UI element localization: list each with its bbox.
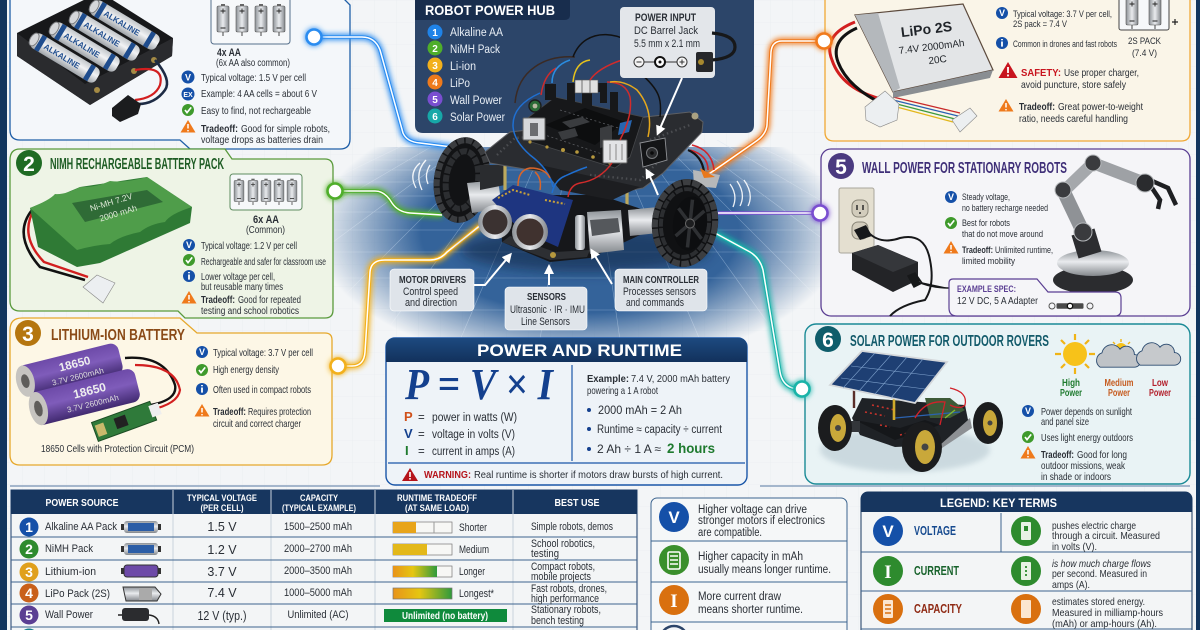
worked example: 2000 mAh = 2 Ah xyxy=(598,403,682,417)
runtime header xyxy=(386,338,747,362)
illustration: AA battery holder: ALKALINE xyxy=(42,42,82,71)
panel 5: wall power xyxy=(821,149,1190,316)
formula key xyxy=(404,409,517,458)
legend row: voltage: V xyxy=(882,522,894,541)
hub key list: 6 xyxy=(432,112,438,123)
callout: main controller xyxy=(615,269,707,311)
arrow: NiMH connector xyxy=(326,182,442,215)
callout: power input: 5.5 mm x 2.1 mm xyxy=(634,38,700,50)
row: wall power xyxy=(20,604,601,627)
formula key: current in amps (A) xyxy=(432,446,515,458)
legend row: voltage: VOLTAGE xyxy=(914,524,956,538)
table header: CAPACITY xyxy=(300,493,339,504)
bullet list: LiPo specs: Typical voltage: 3.7 V per cell, xyxy=(1013,9,1112,20)
hub key list: 1 xyxy=(432,28,438,39)
formula key: = xyxy=(418,446,425,458)
row: lithium-ion: 3 xyxy=(25,564,33,580)
takeaway: current: means shorter runtime. xyxy=(698,604,803,616)
bullet list: alkaline facts: Typical voltage: 1.5 V per cell xyxy=(201,72,306,84)
callout: sensors: Ultrasonic · IR · IMU xyxy=(510,304,585,316)
text: cell configuration: (Common) xyxy=(246,225,285,236)
text: cell configuration xyxy=(216,47,290,69)
row: NiMH: NiMH Pack xyxy=(45,543,93,555)
row: NiMH: 2000–2700 mAh xyxy=(284,543,352,555)
heading: NIMH RECHARGEABLE BATTERY PACK xyxy=(50,156,224,173)
bullet list: li-ion facts: Requires protection xyxy=(248,406,311,418)
table header: TYPICAL VOLTAGE xyxy=(187,493,257,504)
bullet list: wall power facts: V xyxy=(948,192,954,202)
badge 5: 5 xyxy=(835,156,847,179)
icon: 2S pack diagram: 2S PACK xyxy=(1128,36,1162,47)
table header: RUNTIME TRADEOFF xyxy=(397,493,477,504)
row: LiPo: 4 xyxy=(25,585,33,601)
illustration: 18650 cells with PCM: 18650 xyxy=(72,380,108,402)
hub key list xyxy=(428,24,505,124)
takeaway: voltage: are compatible. xyxy=(698,527,762,539)
callout: motor drivers: Control speed xyxy=(403,286,458,298)
table header: (TYPICAL EXAMPLE) xyxy=(282,503,356,514)
bullet list: NiMH facts: Lower voltage per cell, xyxy=(201,272,275,283)
bullet list: li-ion facts: Tradeoff: xyxy=(213,406,246,418)
bullet list: solar facts: Good for long xyxy=(1077,449,1127,461)
panel 1: alkaline AA xyxy=(10,0,350,149)
heading: WALL POWER FOR STATIONARY ROBOTS xyxy=(862,160,1067,177)
arrow: controller to jack xyxy=(647,171,658,195)
row: wall power: Wall Power xyxy=(45,609,93,621)
takeaway: capacity: usually means longer runtime. xyxy=(698,564,831,576)
bullet list: NiMH facts: Tradeoff: xyxy=(201,295,235,306)
panel 2: NiMH pack xyxy=(10,149,333,318)
illustration: AA battery holder: ALKALINE xyxy=(62,31,102,60)
legend header: LEGEND: KEY TERMS xyxy=(940,498,1057,510)
callout: power input: POWER INPUT xyxy=(635,12,696,24)
bullet list: solar facts: Power depends on sunlight xyxy=(1041,406,1132,418)
callout: sensors: SENSORS xyxy=(527,291,566,303)
legend header xyxy=(861,492,1192,512)
left motor xyxy=(467,180,502,213)
ultrasonic sensor xyxy=(492,185,573,247)
callout: main controller: Processes sensors xyxy=(623,286,696,298)
bullet list: NiMH facts: V xyxy=(186,240,192,250)
legend row: voltage: pushes electric charge xyxy=(1052,520,1136,532)
bullet list: solar facts xyxy=(1020,405,1133,483)
warning xyxy=(402,468,723,481)
row: LiPo: LiPo Pack (2S) xyxy=(45,588,110,600)
row: LiPo: 7.4 V xyxy=(207,586,237,600)
icon: 2S pack diagram: (7.4 V) xyxy=(1132,48,1157,59)
bullet list: li-ion facts xyxy=(194,346,313,430)
legend row: capacity xyxy=(873,594,1163,630)
illustration: AA battery holder: ALKALINE xyxy=(82,20,122,49)
illustration: 18650 cells with PCM: 3.7V 2600mAh xyxy=(66,393,120,415)
legend: power levels xyxy=(1060,378,1171,399)
hub key list: Li-ion xyxy=(450,61,476,73)
row: NiMH xyxy=(20,538,595,560)
bullet list: solar facts: in shade or indoors xyxy=(1041,471,1111,483)
safety warning: avoid puncture, store safely xyxy=(1021,79,1127,91)
callout: sensors: Line Sensors xyxy=(521,316,570,328)
worked example: powering a 1 A robot xyxy=(587,385,658,397)
bullet list: wall power facts: that do not move around xyxy=(962,229,1043,240)
callout: motor drivers: and direction xyxy=(405,297,457,309)
legend row: capacity: estimates stored energy. xyxy=(1052,596,1145,608)
legend row: capacity: (mAh) or amp-hours (Ah). xyxy=(1052,618,1157,630)
panel: key takeaways xyxy=(651,498,847,630)
right motors xyxy=(587,210,624,254)
row: lithium-ion: Longer xyxy=(459,566,485,578)
bullet list: li-ion facts: V xyxy=(199,347,205,357)
arrow: main controller xyxy=(592,251,612,284)
worked example xyxy=(587,373,731,456)
formula key: I xyxy=(405,443,409,458)
badge 3: 3 xyxy=(22,323,34,346)
row: alkaline: 1 xyxy=(25,519,33,535)
row: alkaline xyxy=(20,518,613,536)
text: cell configuration: (6x AA also common) xyxy=(216,58,290,69)
worked example: 7.4 V, 2000 mAh battery xyxy=(631,373,731,385)
hub key list: NiMH Pack xyxy=(450,44,500,56)
illustration: wall outlet and adapter xyxy=(839,188,949,316)
bullet list: wall power facts: limited mobility xyxy=(962,256,1015,267)
bullet list: NiMH facts: testing and school robotics xyxy=(201,306,299,317)
illustration: robot arm xyxy=(1053,155,1176,294)
worked example: 2 Ah ÷ 1 A ≈ xyxy=(597,442,661,456)
row: LiPo xyxy=(20,583,607,605)
panel 3: lithium-ion xyxy=(10,318,332,465)
row: NiMH: testing xyxy=(531,548,559,560)
bullet list: LiPo specs: V xyxy=(999,8,1005,18)
callout: power input xyxy=(620,7,735,78)
badge 2: 2 xyxy=(23,153,35,176)
illustration: NiMH battery pack xyxy=(24,177,192,303)
rear wheel xyxy=(428,134,496,226)
bullet list: solar facts: V xyxy=(1025,406,1031,416)
arrow: power input to jack xyxy=(658,78,682,133)
formula key: voltage in volts (V) xyxy=(432,429,515,441)
row: lithium-ion: 2000–3500 mAh xyxy=(284,565,352,577)
formula key: = xyxy=(418,429,425,441)
worked example: 2 hours xyxy=(667,440,715,456)
bullet list: alkaline facts: Tradeoff: xyxy=(201,123,238,135)
row: lithium-ion: Lithium-ion xyxy=(45,566,96,578)
illustration: solar rover xyxy=(818,351,1003,472)
legend row: voltage: through a circuit. Measured xyxy=(1052,530,1160,542)
legend: power levels: Power xyxy=(1060,388,1082,399)
takeaway: voltage: Higher voltage can drive xyxy=(698,504,807,516)
illustration: 18650 cells with PCM: 18650 xyxy=(58,355,92,374)
text: cell configuration: 4x AA xyxy=(217,47,241,59)
illustration: LiPo battery: 7.4V 2000mAh xyxy=(898,38,965,57)
formula key: P xyxy=(404,409,413,424)
worked example: Example: xyxy=(587,373,629,385)
bullet list: solar facts: outdoor missions, weak xyxy=(1041,460,1126,472)
formula key: = xyxy=(418,412,425,424)
panel: legend key terms xyxy=(861,492,1192,630)
formula: P = V × I xyxy=(404,360,555,409)
text: cell configuration: 6x AA xyxy=(253,214,279,226)
row: alkaline: Shorter xyxy=(459,522,487,534)
controller board xyxy=(525,97,643,168)
bullet list: li-ion facts: Typical voltage: 3.7 V per cell xyxy=(213,347,313,359)
legend row: voltage: in volts (V). xyxy=(1052,541,1097,553)
bullet list: wall power facts: Unlimited runtime, xyxy=(995,245,1053,256)
front wheel xyxy=(648,176,722,270)
bullet list: li-ion facts: circuit and correct charger xyxy=(213,418,301,430)
bullet list: solar facts: Tradeoff: xyxy=(1041,449,1074,461)
row: LiPo: high performance xyxy=(531,593,599,605)
illustration: NiMH battery pack: Ni-MH 7.2V xyxy=(89,191,134,213)
icon: 2S pack diagram xyxy=(1119,0,1178,59)
row: wall power: 5 xyxy=(25,607,33,623)
row: alkaline: 1.5 V xyxy=(207,520,237,534)
row: wall power: 12 V (typ.) xyxy=(198,609,246,623)
icon: 4x AA cells xyxy=(211,0,290,44)
legend: power levels: Power xyxy=(1108,388,1130,399)
legend row: current: CURRENT xyxy=(914,564,959,578)
bullet list: NiMH facts: Rechargeable and safer for classroom use xyxy=(201,257,326,268)
illustration: 18650 cells with PCM xyxy=(13,342,180,441)
legend row: capacity: Measured in milliamp-hours xyxy=(1052,607,1163,619)
row: solar (cropped) xyxy=(20,628,38,630)
row: NiMH: 2 xyxy=(25,541,33,557)
row: NiMH: 1.2 V xyxy=(207,543,237,557)
table header xyxy=(11,490,637,514)
sound waves xyxy=(413,160,750,207)
standoffs xyxy=(505,165,627,218)
hub key list: Alkaline AA xyxy=(450,27,503,39)
illustration: LiPo battery xyxy=(830,4,993,132)
bullet list: li-ion facts: High energy density xyxy=(213,364,280,376)
row: wall power: bench testing xyxy=(531,615,584,627)
tradeoff xyxy=(998,99,1143,125)
legend row: current: amps (A). xyxy=(1052,579,1090,591)
arrow: solar connector xyxy=(715,233,811,398)
takeaway: current: More current draw xyxy=(698,591,782,603)
formula key: power in watts (W) xyxy=(432,412,517,424)
panel 6: solar xyxy=(805,324,1190,484)
bullet list: LiPo specs xyxy=(996,7,1117,50)
takeaway: current xyxy=(659,585,803,616)
bullet list: solar facts: Uses light energy outdoors xyxy=(1041,432,1133,444)
bullet list: LiPo specs: 2S pack = 7.4 V xyxy=(1013,19,1068,30)
row: wall power: Stationary robots, xyxy=(531,604,601,616)
arrow: LiPo connector xyxy=(700,32,833,180)
warning: Real runtime is shorter if motors draw bursts of high current. xyxy=(474,469,723,481)
callout: example spec: 12 V DC, 5 A Adapter xyxy=(957,296,1039,307)
bullet list: NiMH facts xyxy=(182,239,326,317)
safety warning xyxy=(998,62,1139,91)
badge 6 xyxy=(815,326,841,352)
legend: power levels: High xyxy=(1062,378,1080,389)
hub key list: 2 xyxy=(432,44,438,55)
hub key list: Solar Power xyxy=(450,112,505,124)
row: wall power: Unlimited (AC) xyxy=(288,609,348,621)
takeaway: voltage xyxy=(659,502,825,539)
formula key: V xyxy=(404,426,413,441)
hub key list: LiPo xyxy=(450,78,470,90)
row: NiMH: School robotics, xyxy=(531,538,595,550)
row: LiPo: Fast robots, drones, xyxy=(531,583,607,595)
badge 5 xyxy=(828,153,854,179)
DC jack xyxy=(640,138,667,167)
illustration: central robot xyxy=(413,35,750,272)
bullet list: alkaline facts: Good for simple robots, xyxy=(241,123,330,135)
bullet list: alkaline facts: Easy to find, not rechargeable xyxy=(201,105,311,117)
illustration: NiMH battery pack: 2000 mAh xyxy=(98,203,138,224)
illustration: LiPo battery: LiPo 2S xyxy=(900,18,953,40)
callout: main controller: and commands xyxy=(626,297,684,309)
badge 6: 6 xyxy=(822,329,834,352)
panel 4: LiPo xyxy=(825,0,1190,141)
safety warning: SAFETY: xyxy=(1021,67,1061,79)
panel: robot power hub xyxy=(415,0,754,133)
callout: sensors xyxy=(505,287,587,330)
caption: 18650 Cells with Protection Circuit (PCM) xyxy=(41,444,194,455)
illustration: 18650 cells with PCM: 3.7V 2600mAh xyxy=(51,366,105,388)
arrow: wall power connector xyxy=(718,204,829,222)
hub key list: 5 xyxy=(432,95,438,106)
bullet list: alkaline facts: voltage drops as batteries drain xyxy=(201,134,323,146)
tradeoff: Tradeoff: xyxy=(1019,101,1055,113)
callout: motor drivers xyxy=(390,269,474,311)
row: lithium-ion: Compact robots, xyxy=(531,561,595,573)
row: alkaline: Simple robots, demos xyxy=(531,521,613,533)
table header: POWER SOURCE xyxy=(46,497,118,509)
bullet list: wall power facts: Tradeoff: xyxy=(962,245,993,256)
arrow: li-ion connector xyxy=(329,224,482,375)
table header: (PER CELL) xyxy=(200,503,244,514)
icon: 6x AA cells xyxy=(230,174,302,210)
badge 2 xyxy=(16,150,42,176)
badge 3 xyxy=(15,320,41,346)
legend row: capacity: CAPACITY xyxy=(914,602,963,616)
bullet list: NiMH facts: Good for repeated xyxy=(238,295,301,306)
row: LiPo: 1000–5000 mAh xyxy=(284,587,352,599)
bullet list: alkaline facts: Example: 4 AA cells = about 6 V xyxy=(201,88,317,100)
bullet list: solar facts: and panel size xyxy=(1041,416,1089,428)
bullet list: wall power facts: no battery recharge needed xyxy=(962,203,1048,214)
legend row: current: per second. Measured in xyxy=(1052,568,1147,580)
hub key list: 3 xyxy=(432,61,438,72)
runtime header: POWER AND RUNTIME xyxy=(477,341,682,360)
row: lithium-ion xyxy=(20,561,595,583)
callout: power input: DC Barrel Jack xyxy=(634,25,698,37)
safety warning: Use proper charger, xyxy=(1064,67,1139,79)
worked example: Runtime ≈ capacity ÷ current xyxy=(597,424,723,436)
row: lithium-ion: mobile projects xyxy=(531,571,591,583)
row: wall power: Unlimited (no battery) xyxy=(402,610,488,622)
legend row: current: is how much charge flows xyxy=(1052,558,1152,570)
heading: SOLAR POWER FOR OUTDOOR ROVERS xyxy=(850,333,1049,350)
illustration: AA battery holder: ALKALINE xyxy=(102,9,142,38)
callout: example spec: EXAMPLE SPEC: xyxy=(957,284,1016,294)
bullet list: wall power facts xyxy=(944,191,1053,267)
bullet list: wall power facts: Steady voltage, xyxy=(962,192,1010,203)
headers and connectors xyxy=(567,83,607,108)
row: LiPo: Longest* xyxy=(459,588,495,600)
table header: (AT SAME LOAD) xyxy=(405,503,469,514)
bullet list: alkaline facts: EX xyxy=(183,92,193,99)
text: cell configuration xyxy=(246,214,285,236)
takeaway: capacity: Higher capacity in mAh xyxy=(698,551,803,563)
hub key list: Wall Power xyxy=(450,95,502,107)
bullet list: li-ion facts: Often used in compact robots xyxy=(213,384,311,396)
hub key list: 4 xyxy=(432,78,438,89)
callout: example spec xyxy=(949,279,1121,316)
illustration: LiPo battery: 20C xyxy=(928,54,947,67)
table header: BEST USE xyxy=(554,497,600,509)
legend row: current xyxy=(873,556,1152,591)
bullet list: alkaline facts: V xyxy=(185,72,191,82)
takeaway: cropped fourth icon xyxy=(660,626,688,630)
bullet list: NiMH facts: Typical voltage: 1.2 V per cell xyxy=(201,241,297,252)
callout: main controller: MAIN CONTROLLER xyxy=(623,274,699,286)
arrow: sensors xyxy=(548,267,550,285)
bullet list: LiPo specs: Common in drones and fast robots xyxy=(1013,39,1117,50)
tradeoff: ratio, needs careful handling xyxy=(1019,113,1128,125)
warning: WARNING: xyxy=(424,469,471,481)
illustration: AA battery holder xyxy=(17,0,173,122)
bullet list: wall power facts: Best for robots xyxy=(962,218,1010,229)
table: power sources xyxy=(11,490,637,630)
row: NiMH: Medium xyxy=(459,544,489,556)
legend: power levels: Medium xyxy=(1104,378,1134,389)
takeaway: current: I xyxy=(670,591,678,612)
bullet list: NiMH facts: but reusable many times xyxy=(201,282,283,293)
panel: power and runtime xyxy=(386,338,747,485)
takeaway: capacity xyxy=(659,545,831,576)
lower deck xyxy=(500,195,650,262)
tradeoff: Great power-to-weight xyxy=(1058,101,1143,113)
row: alkaline: Alkaline AA Pack xyxy=(45,521,117,533)
takeaway: voltage: V xyxy=(668,508,680,527)
takeaway: voltage: stronger motors if electronics xyxy=(698,515,825,527)
callout: motor drivers: MOTOR DRIVERS xyxy=(399,274,466,286)
blueprint floor xyxy=(334,140,820,338)
row: lithium-ion: 3.7 V xyxy=(207,565,237,579)
arrow: motor drivers xyxy=(474,255,510,285)
legend row: current: I xyxy=(884,562,892,583)
wires xyxy=(513,35,661,197)
legend: power levels: Power xyxy=(1149,388,1171,399)
arrow: alkaline connector xyxy=(305,28,452,147)
icons: sun conditions xyxy=(1055,334,1181,374)
row: alkaline: 1500–2500 mAh xyxy=(284,521,352,533)
legend row: voltage xyxy=(873,516,1160,553)
bullet list: alkaline facts xyxy=(180,70,330,146)
hub title: ROBOT POWER HUB xyxy=(425,2,555,18)
legend: power levels: Low xyxy=(1152,378,1168,389)
top plate xyxy=(485,112,703,193)
gold pads xyxy=(528,140,612,165)
heading: LITHIUM-ION BATTERY xyxy=(51,327,185,344)
